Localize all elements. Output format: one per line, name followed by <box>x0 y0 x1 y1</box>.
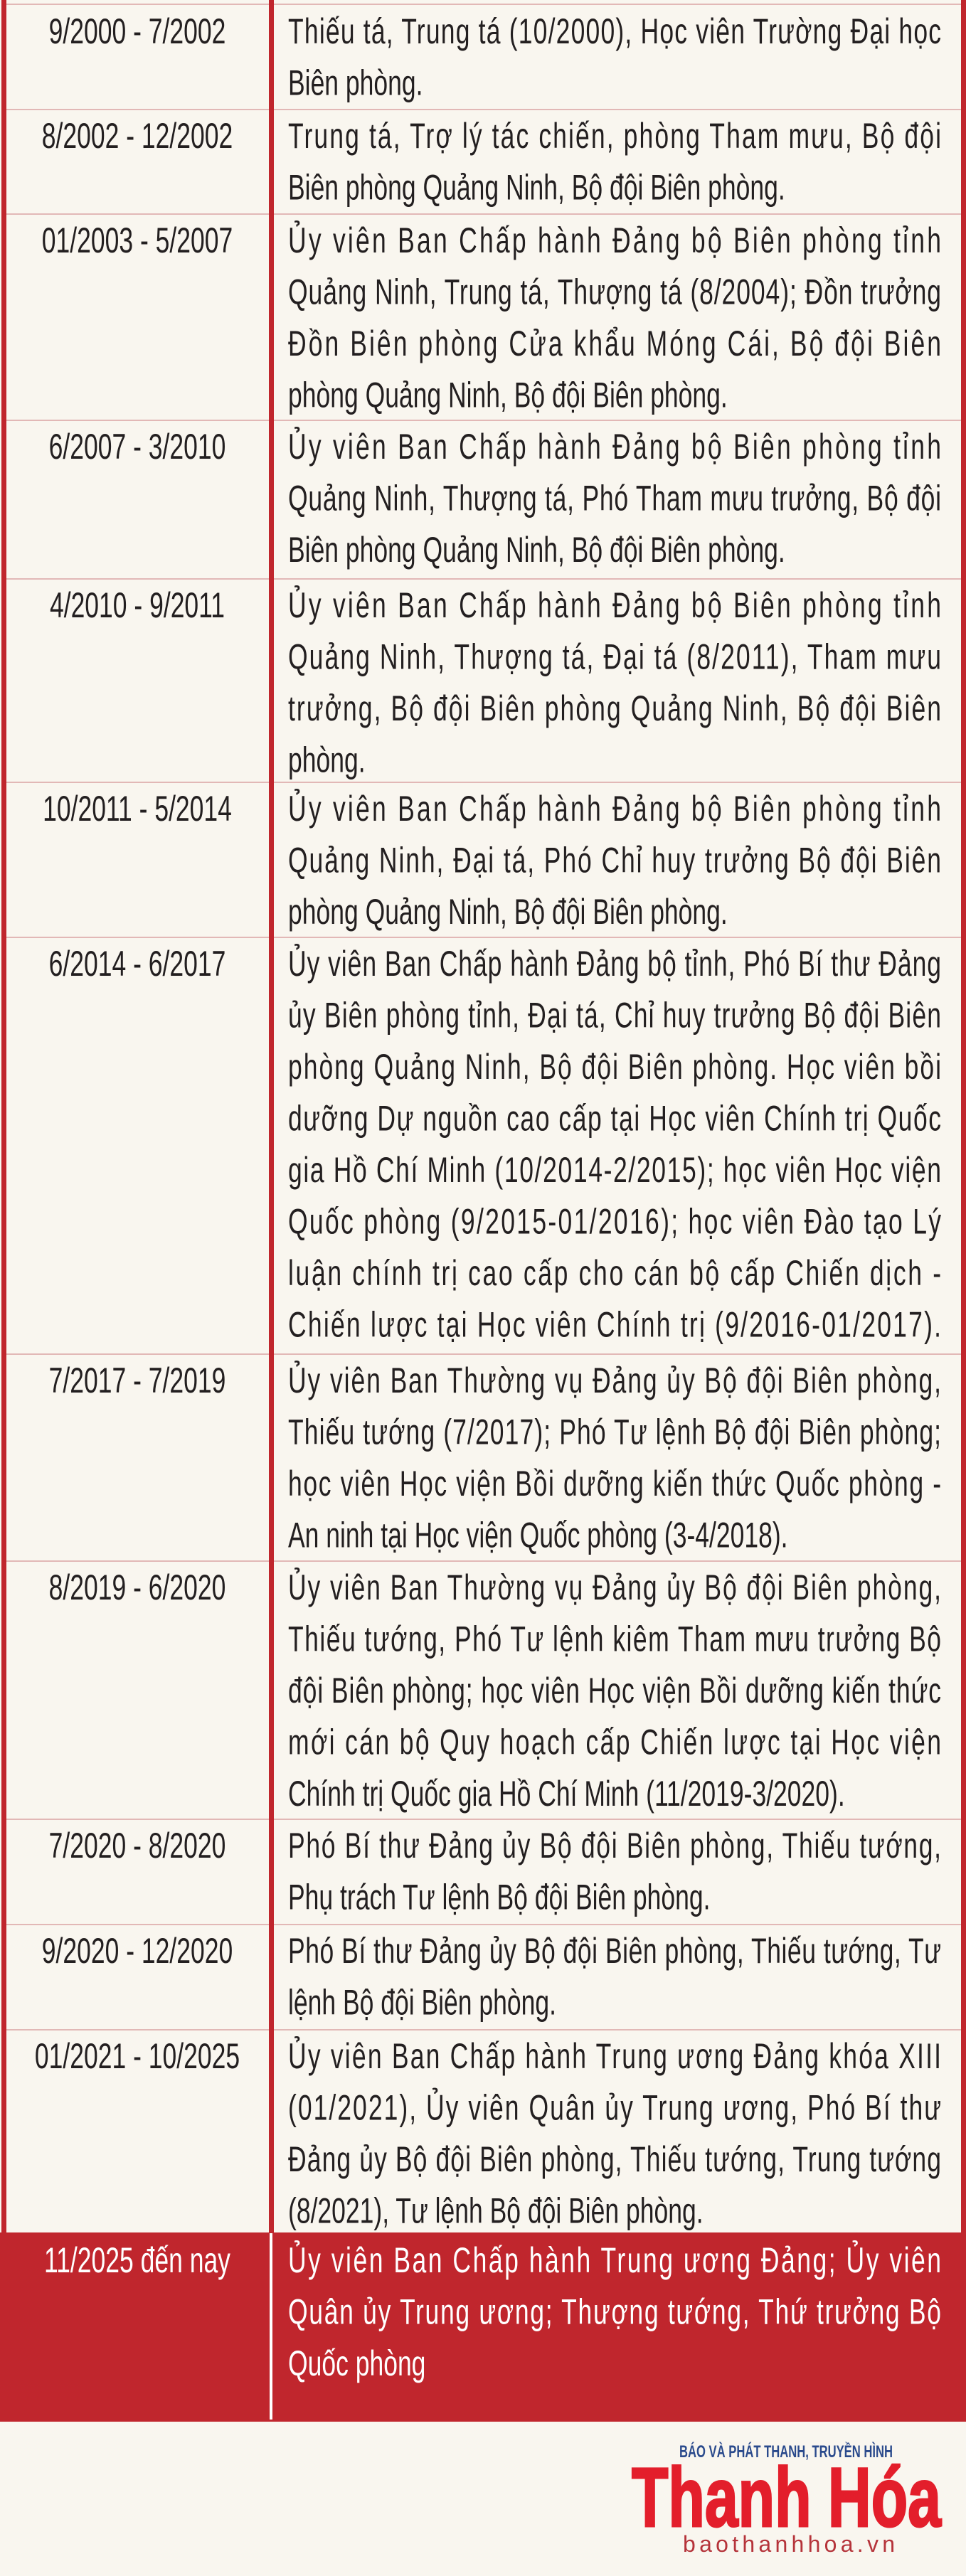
row: 8/2019 - 6/2020: 8/2019 - 6/2020 <box>49 1568 225 1608</box>
row: 8/2002 - 12/2002: 8/2002 - 12/2002 <box>42 117 233 156</box>
row: 10/2011 - 5/2014: Ủy viên Ban Chấp hành Đảng bộ Biên phòng tỉnh <box>288 789 941 829</box>
row: 01/2003 - 5/2007: Quảng Ninh, Trung tá, Thượng tá (8/2004); Đồn trưởng <box>288 273 941 312</box>
row: 01/2021 - 10/2025: 01/2021 - 10/2025 <box>35 2037 240 2077</box>
row: 8/2002 - 12/2002: Trung tá, Trợ lý tác chiến, phòng Tham mưu, Bộ đội <box>288 117 941 156</box>
row: 8/2019 - 6/2020: đội Biên phòng; học viên Học viện Bồi dưỡng kiến thức <box>288 1671 941 1711</box>
row: 10/2011 - 5/2014: 10/2011 - 5/2014 <box>43 789 232 829</box>
row: 01/2021 - 10/2025: (01/2021), Ủy viên Quân ủy Trung ương, Phó Bí thư <box>288 2088 941 2128</box>
row: 7/2020 - 8/2020 <box>49 1826 941 1917</box>
row: 8/2019 - 6/2020: mới cán bộ Quy hoạch cấp Chiến lược tại Học viện <box>288 1723 941 1762</box>
row: 6/2014 - 6/2017: ủy Biên phòng tỉnh, Đại tá, Chỉ huy trưởng Bộ đội Biên <box>288 996 941 1036</box>
row: 01/2021 - 10/2025: Ủy viên Ban Chấp hành Trung ương Đảng khóa XIII <box>288 2036 941 2077</box>
row: 6/2014 - 6/2017 <box>49 944 941 1345</box>
row: 6/2014 - 6/2017: Quốc phòng (9/2015-01/2016); học viên Đào tạo Lý <box>288 1203 941 1242</box>
row: 4/2010 - 9/2011: 4/2010 - 9/2011 <box>50 586 225 626</box>
row: 01/2003 - 5/2007: 01/2003 - 5/2007 <box>42 221 233 261</box>
row: 7/2017 - 7/2019 <box>49 1361 941 1555</box>
row: 6/2014 - 6/2017: luận chính trị cao cấp cho cán bộ cấp Chiến dịch - <box>288 1254 941 1294</box>
row: 6/2007 - 3/2010: Quảng Ninh, Thượng tá, Phó Tham mưu trưởng, Bộ đội <box>288 479 941 518</box>
row: 7/2017 - 7/2019: An ninh tại Học viện Quốc phòng (3-4/2018). <box>288 1516 788 1555</box>
highlighted row: 11/2025 đến nay: Quân ủy Trung ương; Thượng tướng, Thứ trưởng Bộ <box>288 2293 941 2332</box>
row: 8/2019 - 6/2020 <box>49 1568 941 1814</box>
row: 4/2010 - 9/2011: Ủy viên Ban Chấp hành Đảng bộ Biên phòng tỉnh <box>288 585 941 626</box>
row: 01/2021 - 10/2025: (8/2021), Tư lệnh Bộ đội Biên phòng. <box>288 2192 704 2231</box>
row: 7/2020 - 8/2020: Phó Bí thư Đảng ủy Bộ đội Biên phòng, Thiếu tướng, <box>288 1826 941 1866</box>
highlighted row: 11/2025 đến nay: Ủy viên Ban Chấp hành Trung ương Đảng; Ủy viên <box>288 2240 941 2281</box>
row: 01/2003 - 5/2007 <box>42 220 941 415</box>
row: 01/2021 - 10/2025 <box>35 2036 941 2231</box>
logo: Báo và Phát thanh, Truyền hình Thanh Hóa: baothanhhoa.vn <box>683 2531 895 2557</box>
row: 4/2010 - 9/2011: phòng. <box>288 741 366 780</box>
row: 6/2014 - 6/2017: gia Hồ Chí Minh (10/2014-2/2015); học viên Học viện <box>288 1151 941 1191</box>
row: 10/2011 - 5/2014 <box>43 789 941 932</box>
row: 7/2017 - 7/2019: học viên Học viện Bồi dưỡng kiến thức Quốc phòng - <box>288 1464 941 1504</box>
row: 4/2010 - 9/2011 <box>50 585 941 780</box>
row: 01/2021 - 10/2025: Đảng ủy Bộ đội Biên phòng, Thiếu tướng, Trung tướng <box>288 2140 941 2180</box>
row: 6/2014 - 6/2017: 6/2014 - 6/2017 <box>49 944 225 984</box>
row: 6/2007 - 3/2010: 6/2007 - 3/2010 <box>49 427 225 467</box>
row: 9/2020 - 12/2020: lệnh Bộ đội Biên phòng. <box>288 1984 556 2023</box>
row: 4/2010 - 9/2011: trưởng, Bộ đội Biên phòng Quảng Ninh, Bộ đội Biên <box>288 689 941 729</box>
row: 7/2020 - 8/2020: Phụ trách Tư lệnh Bộ đội Biên phòng. <box>288 1878 710 1917</box>
row: 9/2020 - 12/2020: 9/2020 - 12/2020 <box>42 1932 233 1971</box>
row: 9/2020 - 12/2020: Phó Bí thư Đảng ủy Bộ đội Biên phòng, Thiếu tướng, Tư <box>288 1932 941 1971</box>
row: 8/2019 - 6/2020: Chính trị Quốc gia Hồ Chí Minh (11/2019-3/2020). <box>288 1774 845 1814</box>
row: 7/2017 - 7/2019: 7/2017 - 7/2019 <box>49 1361 225 1401</box>
row: 9/2000 - 7/2002: Biên phòng. <box>288 64 423 103</box>
row: 8/2019 - 6/2020: Ủy viên Ban Thường vụ Đảng ủy Bộ đội Biên phòng, <box>288 1568 941 1608</box>
row: 01/2003 - 5/2007: Ủy viên Ban Chấp hành Đảng bộ Biên phòng tỉnh <box>288 220 941 261</box>
row: 7/2017 - 7/2019: Ủy viên Ban Thường vụ Đảng ủy Bộ đội Biên phòng, <box>288 1361 941 1401</box>
highlighted row: 11/2025 đến nay <box>0 2232 966 2422</box>
highlighted row: 11/2025 đến nay: Quốc phòng <box>288 2344 425 2384</box>
row: 6/2014 - 6/2017: Chiến lược tại Học viên Chính trị (9/2016-01/2017). <box>288 1306 941 1345</box>
row: 6/2014 - 6/2017: phòng Quảng Ninh, Bộ đội Biên phòng. Học viên bồi <box>288 1048 941 1087</box>
row: 6/2007 - 3/2010 <box>49 427 941 570</box>
row: 7/2020 - 8/2020: 7/2020 - 8/2020 <box>49 1826 225 1866</box>
row: 9/2000 - 7/2002 <box>49 12 941 103</box>
row: 9/2000 - 7/2002: Thiếu tá, Trung tá (10/2000), Học viên Trường Đại học <box>288 12 941 52</box>
row: 8/2019 - 6/2020: Thiếu tướng, Phó Tư lệnh kiêm Tham mưu trưởng Bộ <box>288 1620 941 1659</box>
row: 6/2014 - 6/2017: dưỡng Dự nguồn cao cấp tại Học viên Chính trị Quốc <box>288 1100 941 1139</box>
row: 01/2003 - 5/2007: Đồn Biên phòng Cửa khẩu Móng Cái, Bộ đội Biên <box>288 324 941 364</box>
row: 6/2007 - 3/2010: Ủy viên Ban Chấp hành Đảng bộ Biên phòng tỉnh <box>288 427 941 467</box>
row: 6/2014 - 6/2017: Ủy viên Ban Chấp hành Đảng bộ tỉnh, Phó Bí thư Đảng <box>288 944 941 984</box>
row: 10/2011 - 5/2014: Quảng Ninh, Đại tá, Phó Chỉ huy trưởng Bộ đội Biên <box>288 841 941 880</box>
row: 6/2007 - 3/2010: Biên phòng Quảng Ninh, Bộ đội Biên phòng. <box>288 531 785 570</box>
row: 9/2020 - 12/2020 <box>42 1932 941 2023</box>
row: 10/2011 - 5/2014: phòng Quảng Ninh, Bộ đội Biên phòng. <box>288 893 728 932</box>
row: 9/2000 - 7/2002: 9/2000 - 7/2002 <box>49 12 225 52</box>
row: 7/2017 - 7/2019: Thiếu tướng (7/2017); Phó Tư lệnh Bộ đội Biên phòng; <box>288 1413 941 1452</box>
row: 8/2002 - 12/2002 <box>42 117 941 208</box>
highlighted row: 11/2025 đến nay: 11/2025 đến nay <box>44 2241 230 2281</box>
row: 4/2010 - 9/2011: Quảng Ninh, Thượng tá, Đại tá (8/2011), Tham mưu <box>288 638 941 677</box>
row: 8/2002 - 12/2002: Biên phòng Quảng Ninh, Bộ đội Biên phòng. <box>288 169 785 208</box>
row: 01/2003 - 5/2007: phòng Quảng Ninh, Bộ đội Biên phòng. <box>288 376 728 415</box>
